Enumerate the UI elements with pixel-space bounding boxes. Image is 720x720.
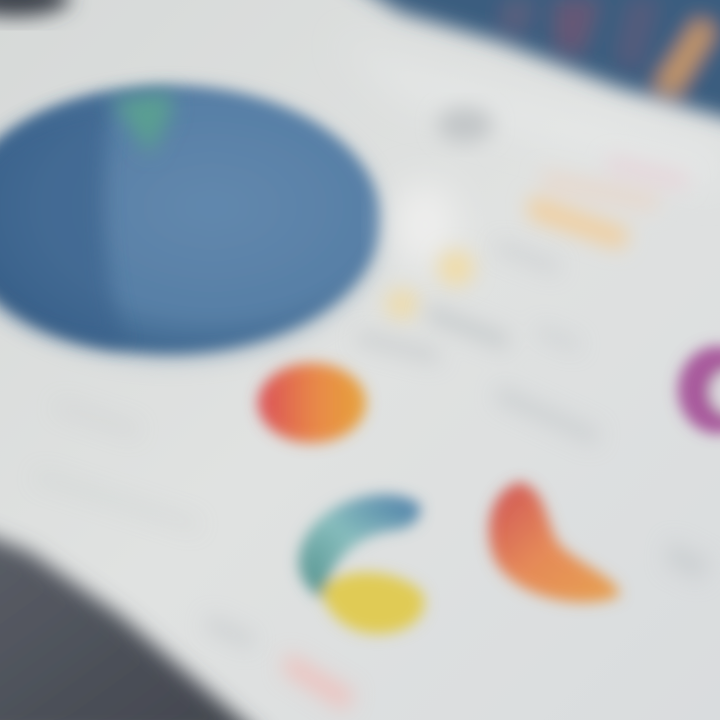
large blue pie chart bbox=[0, 86, 386, 364]
green slice bbox=[112, 92, 172, 155]
dark chart panel top right bbox=[335, 0, 720, 125]
pie body bbox=[0, 86, 380, 354]
dark corner top left bbox=[0, 0, 70, 16]
pink label smudge bbox=[282, 652, 355, 712]
pale page highlight bbox=[393, 183, 457, 267]
legend swatches bbox=[385, 250, 474, 320]
red orange crescent bbox=[489, 482, 620, 602]
pale orange and pink text smudges bbox=[528, 155, 690, 250]
darker left slice bbox=[0, 100, 125, 345]
dark desk bottom left bbox=[0, 528, 265, 720]
soft highlight under panel bbox=[340, 40, 720, 190]
small grey label smudge bbox=[437, 107, 493, 143]
grey text smudges bbox=[35, 240, 712, 650]
teal blue yellow crescent bbox=[299, 495, 424, 634]
purple ring at right edge bbox=[678, 346, 720, 434]
blurred bar streaks bbox=[498, 0, 716, 96]
teal blue arc bbox=[299, 495, 420, 600]
pie shadow bbox=[0, 88, 386, 364]
orange red circle bbox=[258, 363, 366, 443]
yellow lobe bbox=[322, 572, 424, 634]
